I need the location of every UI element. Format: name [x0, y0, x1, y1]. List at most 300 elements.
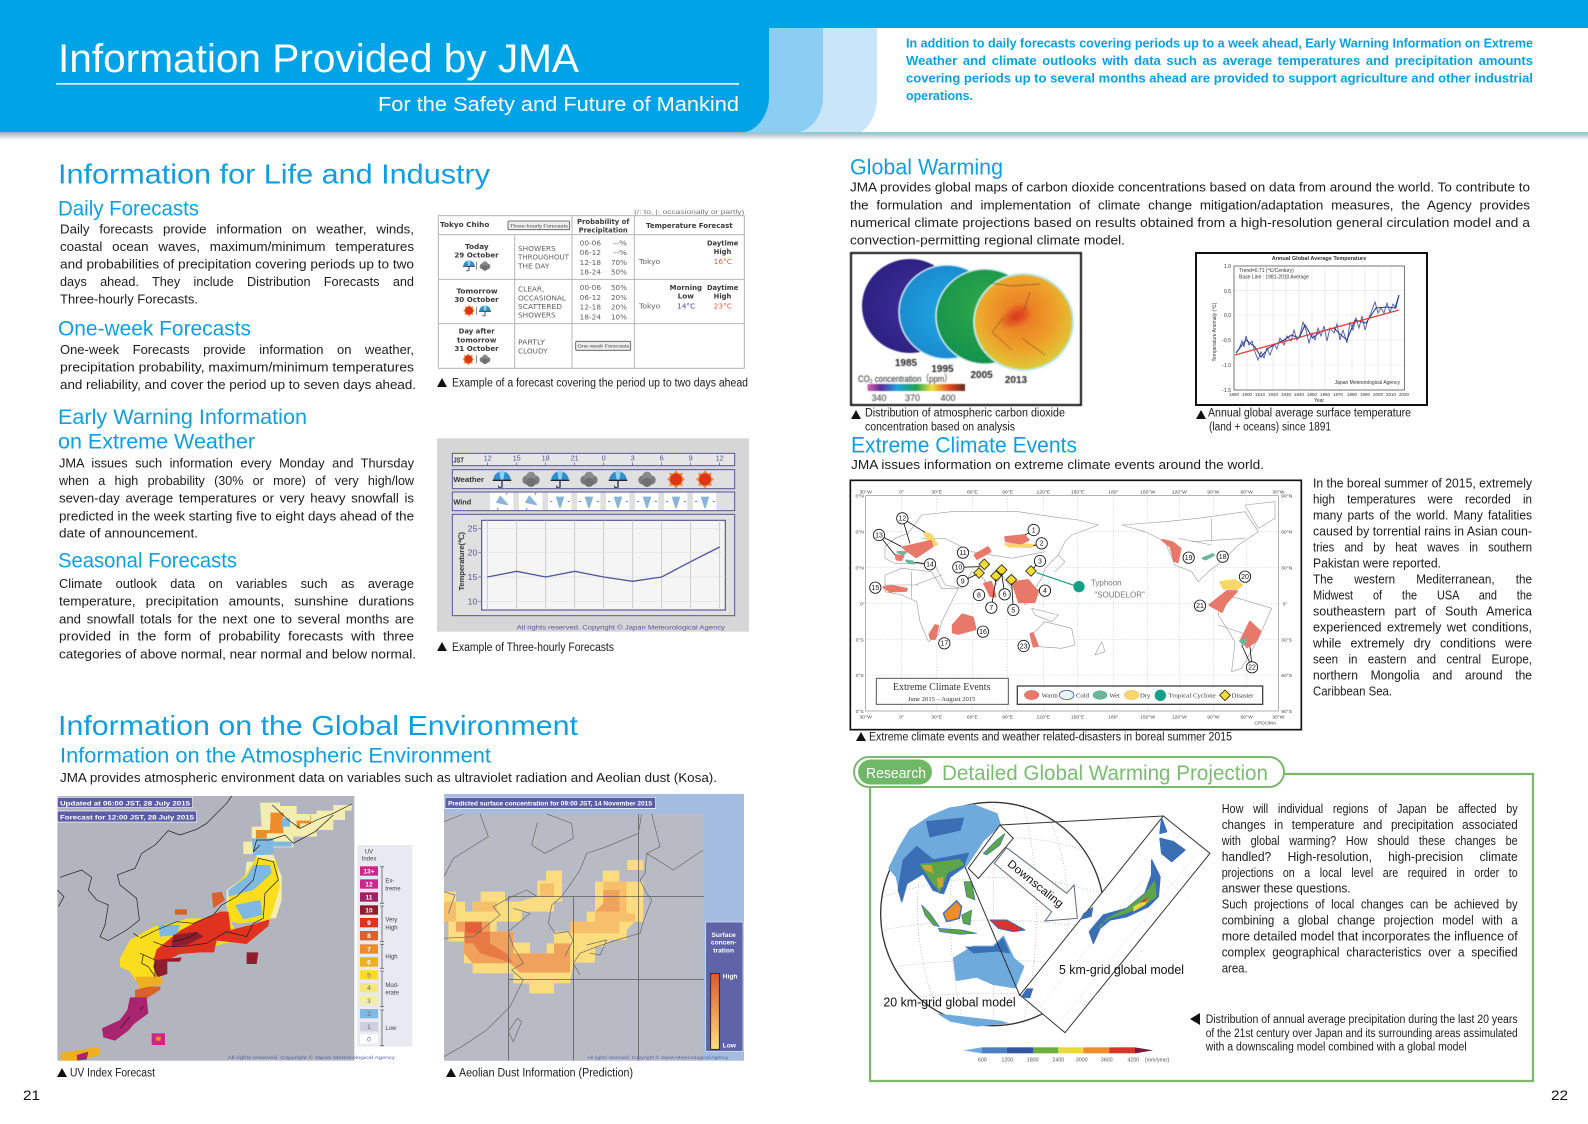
text: seasonal forecasts: provided in the form of probability forecasts with three — [59, 629, 414, 644]
typhoon SOUDELOR: "SOUDELOR" — [1094, 591, 1145, 600]
caption: CO2: concentration based on analysis — [865, 422, 1015, 434]
heading: Early Warning Information on Extreme Weather: on Extreme Weather — [58, 430, 255, 453]
text: daily forecasts — [60, 221, 415, 306]
text: one-week forecasts: One-week Forecasts provide information on weather, — [60, 342, 414, 357]
text: global warming — [850, 180, 1531, 247]
text: daily forecasts: coastal ocean waves, maximum/minimum temperatures — [60, 239, 415, 254]
caption: three-hourly forecasts: Example of Three-hourly Forecasts — [452, 642, 614, 654]
caption: forecast table: Example of a forecast covering the period up to two days ahead — [452, 378, 748, 390]
extreme climate events world map: 90°W — [1207, 489, 1220, 495]
forecast table: 70% — [611, 258, 627, 267]
annual global average temperature chart: 1960 — [1320, 392, 1331, 397]
CO2 globes figure: 400 — [940, 393, 956, 403]
forecast table: --% — [613, 248, 627, 257]
numbered event markers: 23 — [1020, 643, 1028, 650]
UV legend: High — [385, 925, 398, 931]
text: research paragraph: area. — [1222, 960, 1248, 975]
forecast table: 18-24 — [580, 268, 601, 277]
extreme climate events world map: 30°S — [1281, 637, 1293, 643]
three-hourly forecast chart: Weather — [453, 475, 484, 484]
UV index forecast map: Updated at 06:00 JST, 28 July 2015 — [60, 800, 190, 807]
text: research paragraph: projections on a local level are required in order to — [1222, 865, 1518, 880]
three-hourly forecast chart: 0 — [602, 454, 606, 463]
forecast table: Morning — [670, 283, 702, 292]
numbered event markers: 1 — [1032, 527, 1036, 534]
extreme climate events world map: 120°W — [1172, 489, 1187, 495]
forecast table: SHOWERS — [518, 311, 556, 320]
extreme climate events world map: 30°N — [1281, 566, 1293, 572]
extreme climate events world map: 60°W — [1241, 489, 1253, 495]
extreme climate events world map: 0° — [860, 601, 865, 607]
intro text: In addition to daily forecasts covering periods up to a week ahead, Early Warning Information on Extreme — [906, 36, 1533, 50]
forecast table: Low — [678, 292, 694, 301]
text: research paragraph: answer these questions. — [1222, 881, 1351, 896]
annual global average temperature chart: 1980 — [1347, 392, 1358, 397]
map legend — [1017, 686, 1263, 704]
numbered event markers: 11 — [959, 550, 967, 557]
text: daily forecasts: Daily forecasts provide information on weather, winds, — [60, 221, 414, 236]
three-hourly forecast chart: 3 — [631, 454, 635, 463]
warm, dry and wet event areas — [884, 533, 1260, 647]
text: boreal summer paragraph: while extremely dry conditions were — [1312, 635, 1532, 650]
intro text: operations. — [906, 88, 973, 103]
numbered event markers: 8 — [977, 592, 981, 599]
downscaling arrow — [994, 848, 1077, 921]
extreme climate events world map — [850, 480, 1301, 730]
annual global average temperature chart: Year — [1314, 398, 1324, 404]
extreme climate events world map: 0°N — [855, 494, 864, 500]
three-hourly forecast chart: 21 — [571, 454, 579, 463]
forecast table: SHOWERS — [518, 244, 556, 253]
aeolian dust map: All rights reserved. Copyright © Japan Meteorological Agency — [587, 1055, 729, 1060]
forecast table: 31 October — [454, 344, 499, 353]
extreme climate events world map: 150°E — [1071, 489, 1085, 495]
text: seasonal forecasts: temperature, precipitation amounts, sunshine durations — [59, 594, 415, 609]
numbered event markers: 10 — [954, 565, 962, 572]
annual global average temperature chart — [1196, 253, 1427, 405]
numbered event markers: 18 — [1219, 554, 1227, 561]
annual global average temperature chart: -0.5 — [1222, 338, 1231, 344]
UV legend — [357, 845, 412, 1047]
aeolian dust map — [444, 794, 744, 1061]
UV legend: 2 — [367, 1011, 371, 1018]
text: boreal summer paragraph: southeastern part of South America — [1313, 603, 1533, 618]
numbered event markers: 20 — [1241, 574, 1249, 581]
heading: Daily Forecasts: Daily Forecasts — [58, 198, 199, 221]
extreme climate events world map: 0°N — [855, 566, 864, 572]
extreme climate events world map: 0°S — [856, 637, 864, 643]
extreme climate events world map: 0°S — [856, 673, 864, 679]
forecast table: Tokyo — [638, 257, 661, 266]
forecast table: 20% — [611, 293, 627, 302]
numbered event markers: 15 — [871, 585, 879, 592]
UV legend: High — [385, 954, 398, 960]
intro text — [906, 36, 1533, 103]
caption: UV index: UV Index Forecast — [70, 1068, 156, 1080]
UV legend: 11 — [365, 894, 373, 901]
map legend: Wet — [1109, 692, 1120, 699]
text: early warning: JMA issues such information every Monday and Thursday — [59, 456, 414, 471]
numbered event markers: 7 — [989, 605, 993, 612]
annual global average temperature chart: 1910 — [1255, 392, 1266, 397]
precipitation colour bar: 2400 — [1052, 1057, 1064, 1063]
forecast table: 00-06 — [580, 283, 601, 292]
extreme climate events world map: 60°E — [967, 714, 978, 720]
numbered event markers: 16 — [979, 629, 987, 636]
annual global average temperature chart: Trend=0.71 (℃/Century) — [1239, 268, 1294, 274]
text: boreal summer paragraph: The western Mediterranean, the — [1313, 571, 1532, 586]
forecast table: 12-18 — [580, 303, 601, 312]
text: extreme climate intro: JMA issues information on extreme climate events around the world. — [851, 457, 1264, 472]
numbered event markers: 21 — [1196, 603, 1204, 610]
downscaling arrow: Downscaling — [1005, 858, 1065, 910]
text: boreal summer paragraph: northern Mongolia and around the — [1313, 667, 1532, 682]
UV index forecast map: All rights reserved. Copyright © Japan Meteorological Agency — [228, 1054, 396, 1060]
intro text: Weather and climate outlooks with data such as average temperatures and precipitation amounts — [906, 53, 1533, 68]
map title box: June 2015 – August 2015 — [908, 696, 976, 703]
aeolian dust map: Predicted surface concentration for 09:00 JST, 14 November 2015 — [448, 800, 652, 807]
text: boreal summer paragraph — [1312, 475, 1533, 698]
forecast table: PARTLY — [518, 338, 546, 347]
three-hourly forecast chart: 20 — [468, 548, 478, 558]
page number 21: 21 — [23, 1087, 40, 1103]
UV legend: treme — [385, 886, 401, 892]
numbered event markers: 2 — [1040, 541, 1044, 548]
UV legend: Low — [385, 1026, 397, 1032]
UV legend: Ex- — [385, 879, 394, 885]
extreme climate events world map: 30°W — [860, 714, 872, 720]
UV legend: erate — [385, 991, 400, 997]
text: boreal summer paragraph: tries and by heat waves in southern — [1313, 539, 1532, 554]
map title box: Extreme Climate Events — [893, 682, 991, 693]
forecast table: 10% — [611, 312, 627, 321]
three-hourly forecast chart: Temperature(℃) — [457, 531, 466, 591]
forecast table: Three-hourly Forecasts — [510, 223, 569, 229]
header band — [0, 0, 1588, 140]
forecast table: 30 October — [454, 295, 499, 304]
annual global average temperature chart: 1970 — [1333, 392, 1344, 397]
heading: Early Warning Information on Extreme Weather — [58, 406, 307, 453]
text: global warming: JMA provides global maps of carbon dioxide concentrations based on data from around the world. To contribute to — [850, 180, 1530, 194]
extreme climate events world map: 60°W — [1241, 714, 1253, 720]
numbered event markers: 19 — [1185, 555, 1193, 562]
text: research paragraph: How will individual regions of Japan be affected by — [1222, 801, 1518, 816]
numbered event markers: 13 — [875, 532, 883, 539]
text: boreal summer paragraph: In the boreal summer of 2015, extremely — [1313, 475, 1532, 490]
forecast table: 12-18 — [580, 258, 601, 267]
text: daily forecasts: and probabilities of precipitation covering periods up to two — [60, 256, 414, 271]
extreme climate events world map: 30°W — [1272, 489, 1285, 495]
text: seasonal forecasts — [59, 576, 416, 661]
annual global average temperature chart: Annual Global Average Temperature — [1272, 256, 1366, 262]
text: early warning — [58, 456, 415, 541]
forecast table: CLOUDY — [518, 346, 548, 355]
extreme climate events world map: CPD/JMA — [1254, 720, 1277, 726]
text: early warning: seven-day average temperatures or very heavy snowfall is — [59, 491, 415, 506]
map legend: Tropical Cyclone — [1168, 692, 1216, 699]
CO2 globes figure: 370 — [905, 393, 920, 403]
forecast table: 20% — [611, 303, 627, 312]
heading: Extreme Climate Events: Extreme Climate Events — [851, 432, 1077, 458]
text: early warning: when a high probability (30% or more) of very high/low — [58, 473, 415, 488]
annual global average temperature chart: 1900 — [1242, 392, 1253, 397]
numbered event markers: 5 — [1011, 607, 1015, 614]
precipitation colour bar: 3000 — [1076, 1057, 1088, 1063]
text: one-week forecasts — [60, 342, 416, 392]
text: daily forecasts: days ahead. They include Distribution Forecasts and — [60, 274, 414, 289]
caption: temperature — [1196, 408, 1411, 434]
text: research paragraph: combining a global change projection model with a — [1222, 912, 1518, 928]
extreme climate events world map: 0° — [1283, 601, 1287, 607]
extreme climate events world map: 180° — [1108, 714, 1118, 720]
forecast table: Probability of — [577, 217, 630, 226]
CO2 globes figure — [851, 253, 1081, 405]
forecast table: Temperature Forecast — [646, 221, 733, 230]
heading: Seasonal Forecasts: Seasonal Forecasts — [58, 550, 237, 573]
three-hourly forecast chart — [437, 438, 749, 632]
forecast table: Daytime — [707, 238, 738, 247]
annual global average temperature chart: 1890 — [1229, 392, 1240, 397]
three-hourly forecast chart: All rights reserved. Copyright © Japan Meteorological Agency — [517, 623, 726, 631]
downscaling map figure: 5 km-grid global model — [1059, 962, 1184, 977]
forecast table: THROUGHOUT — [517, 253, 569, 262]
dust legend: High — [723, 974, 737, 981]
three-hourly forecast chart: 12 — [484, 454, 492, 463]
forecast table: Daytime — [707, 283, 738, 292]
three-hourly forecast chart: JST — [453, 456, 464, 465]
forecast table: tomorrow — [457, 335, 497, 344]
annual global average temperature chart: 2020 — [1399, 392, 1410, 397]
forecast table: Tokyo — [638, 301, 661, 310]
caption: precipitation distribution: of the 21st century over Japan and its surrounding areas assimulated — [1206, 1028, 1518, 1040]
forecast table: 18-24 — [580, 312, 601, 321]
extreme climate events world map: 90°W — [1207, 714, 1220, 720]
text: boreal summer paragraph: Caribbean Sea. — [1313, 683, 1392, 698]
dust legend: concen- — [711, 940, 736, 947]
text: research paragraph: with global warming? How should these changes be — [1221, 833, 1518, 848]
text: research paragraph: changes in temperature and precipitation associated — [1222, 817, 1518, 832]
extreme climate events world map: 0° — [899, 489, 904, 495]
forecast table: 16°C — [714, 257, 732, 266]
text: early warning: date of announcement. — [59, 526, 198, 541]
annual global average temperature chart: 1990 — [1360, 392, 1371, 397]
forecast table: 50% — [611, 283, 627, 292]
forecast table: Precipitation — [579, 226, 628, 235]
page number 22: 22 — [1551, 1087, 1568, 1103]
CO2 globes figure: 1995 — [931, 364, 954, 375]
extreme climate events world map: 60°E — [967, 489, 978, 495]
extreme climate events world map: 30°W — [1272, 714, 1285, 720]
text: research paragraph: Such projections of local changes can be achieved by — [1222, 897, 1518, 912]
extreme climate events world map: 120°W — [1172, 714, 1187, 720]
text: boreal summer paragraph: many parts of the world. Many fatalities — [1313, 507, 1532, 522]
forecast table: 50% — [611, 268, 627, 277]
precipitation colour bar: 3600 — [1101, 1057, 1113, 1063]
text: research paragraph: complex geographical characteristics over a specified — [1222, 944, 1518, 959]
text: one-week forecasts: and reliability, and cover the period up to seven days ahead. — [60, 377, 416, 392]
map title box — [876, 678, 1008, 704]
UV legend: 6 — [367, 959, 371, 966]
research title capsule — [854, 757, 1284, 787]
UV legend: 9 — [367, 920, 371, 927]
extreme climate events world map: 60°S — [1281, 673, 1293, 679]
three-hourly forecast chart: 10 — [468, 597, 478, 607]
forecast table: OCCASIONAL — [518, 293, 567, 302]
extreme climate events world map: 30°E — [931, 489, 943, 495]
text: research paragraph: more detailed model that incorporates the influence of — [1222, 928, 1518, 944]
heading: Early Warning Information on Extreme Weather: Early Warning Information — [58, 406, 307, 429]
heading: Information on the Atmospheric Environment: Information on the Atmospheric Environment — [60, 745, 491, 768]
annual global average temperature chart: Temperature Anomaly (℃) — [1212, 302, 1218, 361]
typhoon SOUDELOR: Typhoon — [1091, 579, 1122, 588]
heading: Global Warming: Global Warming — [850, 154, 1003, 180]
typhoon SOUDELOR — [1037, 573, 1145, 600]
annual global average temperature chart: 2010 — [1386, 392, 1397, 397]
forecast table: Today — [465, 242, 489, 251]
numbered event markers — [870, 513, 1258, 673]
extreme climate events world map: 90°S — [1281, 709, 1293, 715]
three-hourly forecast chart: 15 — [513, 454, 521, 463]
three-hourly forecast chart: 25 — [468, 523, 478, 533]
heading: Information for Life and Industry: Information for Life and Industry — [58, 159, 490, 190]
forecast table: One-week Forecasts — [577, 344, 630, 350]
CO2 globes figure: 2013 — [1005, 375, 1028, 386]
extreme climate events world map: 0°S — [856, 709, 864, 715]
heading: Information on the Global Environment: Information on the Global Environment — [58, 710, 578, 741]
UV legend: 1 — [367, 1024, 371, 1031]
extreme climate events world map: 150°W — [1140, 714, 1155, 720]
text: boreal summer paragraph: Midwest of the USA and the — [1313, 587, 1532, 602]
UV legend: 4 — [367, 985, 371, 992]
caption: CO2 — [851, 408, 1065, 434]
caption: precipitation distribution — [1190, 1013, 1518, 1054]
forecast table: High — [714, 247, 731, 256]
heading: One-week Forecasts: One-week Forecasts — [58, 318, 251, 341]
precipitation colour bar: 1200 — [1001, 1057, 1013, 1063]
numbered event markers: 4 — [1043, 588, 1047, 595]
forecast table: Day after — [459, 327, 495, 336]
extreme climate events world map: 30°E — [931, 714, 943, 720]
UV legend: 8 — [367, 933, 371, 940]
caption: temperature: Annual global average surface temperature — [1208, 408, 1411, 420]
forecast table: Tokyo Chiho — [440, 220, 489, 229]
dust legend: Low — [723, 1042, 737, 1049]
three-hourly forecast chart: 15 — [468, 572, 478, 582]
text: global warming: convection-permitting regional climate model. — [850, 232, 1125, 247]
extreme climate events world map: 150°W — [1140, 489, 1155, 495]
text: early warning: predicted in the week starting five to eight days ahead of the — [59, 508, 414, 523]
caption: extreme climate map: Extreme climate events and weather related-disasters in boreal summer 2015 — [869, 732, 1232, 744]
UV legend: 3 — [367, 998, 371, 1005]
three-hourly forecast chart: 18 — [542, 454, 550, 463]
annual global average temperature chart: 1940 — [1294, 392, 1305, 397]
text: one-week forecasts: precipitation probability, maximum/minimum temperatures — [60, 360, 415, 375]
UV legend: Mod- — [385, 983, 399, 989]
extreme climate events world map: 120°E — [1037, 489, 1051, 495]
three-hourly forecast chart: 6 — [660, 454, 664, 463]
extreme climate events world map: 90°N — [1281, 494, 1293, 500]
UV legend: 5 — [367, 972, 371, 979]
three-hourly forecast chart: 9 — [689, 454, 693, 463]
extreme climate events world map: 150°E — [1071, 714, 1085, 720]
UV legend: 13+ — [363, 868, 375, 875]
downscaling map figure — [881, 802, 1210, 1063]
forecast table — [438, 209, 744, 368]
intro text: covering periods up to several months ahead are provided to support agriculture and other industrial — [906, 70, 1533, 86]
text: boreal summer paragraph: caused by torrential rains in Asian coun- — [1313, 523, 1532, 538]
three-hourly forecast chart: Wind — [453, 497, 471, 506]
UV index forecast map — [57, 796, 412, 1061]
annual global average temperature chart: Base Line : 1981-2010 Average — [1239, 274, 1309, 280]
dust legend — [706, 922, 743, 1051]
text: global warming: the formulation and implementation of climate change mitigation/adaptation measures, the Agency provides — [850, 197, 1531, 212]
text: research paragraph — [1221, 801, 1518, 975]
annual global average temperature chart: Japan Meteorological Agency — [1335, 380, 1400, 386]
UV legend: 0 — [367, 1036, 371, 1043]
research title capsule: Research — [866, 765, 926, 782]
text: boreal summer paragraph: experienced extremely wet conditions, — [1313, 619, 1532, 634]
three-hourly forecast chart: 12 — [716, 454, 724, 463]
dust legend: tration — [713, 947, 734, 954]
forecast table: 00-06 — [580, 238, 601, 247]
forecast table: 06-12 — [580, 293, 601, 302]
forecast table: THE DAY — [517, 261, 550, 270]
CO2 globes figure: CO₂ concentration（ppm） — [858, 373, 952, 385]
forecast table: High — [714, 292, 731, 301]
forecast table: SCATTERED — [518, 302, 562, 311]
text: seasonal forecasts: Climate outlook data on variables such as average — [59, 576, 414, 591]
forecast table: CLEAR, — [518, 284, 544, 293]
forecast table: 29 October — [454, 251, 499, 260]
extreme climate events world map: 0°N — [855, 530, 864, 536]
caption: temperature: (land + oceans) since 1891 — [1209, 422, 1331, 434]
map legend: Cold — [1076, 692, 1090, 699]
numbered event markers: 3 — [1038, 558, 1042, 565]
subtitle: For the Safety and Future of Mankind — [378, 94, 739, 116]
numbered event markers: 6 — [1003, 592, 1007, 599]
CO2 globes figure: 340 — [871, 393, 887, 403]
UV legend: 7 — [367, 946, 371, 953]
numbered event markers: 9 — [961, 578, 965, 585]
precipitation colour bar: [mm/year] — [1145, 1057, 1169, 1063]
panel: research detailed global warming projection — [854, 757, 1533, 1081]
annual global average temperature chart: 1.0 — [1224, 264, 1231, 270]
map legend: Disaster — [1232, 692, 1254, 699]
UV legend: 12 — [365, 881, 373, 888]
annual global average temperature chart: 2000 — [1373, 392, 1384, 397]
annual global average temperature chart: -1.0 — [1222, 363, 1231, 369]
annual global average temperature chart: 1950 — [1307, 392, 1318, 397]
CO2 globes figure: 2005 — [970, 370, 993, 381]
caption: precipitation distribution: Distribution of annual average precipitation during the last 20 years — [1206, 1014, 1518, 1026]
numbered event markers: 12 — [898, 516, 906, 523]
extreme climate events world map: 180° — [1108, 489, 1118, 495]
dust legend: Surface — [711, 932, 736, 939]
UV legend: Index — [362, 857, 376, 863]
precipitation colour bar: 4200 — [1127, 1057, 1139, 1063]
precipitation colour bar: 600 — [978, 1057, 987, 1063]
caption: aeolian dust: Aeolian Dust Information (Prediction) — [459, 1068, 633, 1080]
forecast table: Tomorrow — [456, 286, 498, 295]
UV index forecast map: Forecast for 12:00 JST, 28 July 2015 — [60, 814, 194, 821]
annual global average temperature chart: 0.0 — [1224, 313, 1231, 319]
UV legend: UV — [365, 849, 373, 855]
caption: precipitation distribution: with a downscaling model combined with a global model — [1205, 1042, 1467, 1054]
annual global average temperature chart: 0.5 — [1224, 289, 1231, 295]
numbered event markers: 17 — [940, 641, 948, 648]
text: boreal summer paragraph: Pakistan were reported. — [1313, 555, 1441, 570]
text: daily forecasts: Three-hourly Forecasts. — [60, 291, 198, 306]
